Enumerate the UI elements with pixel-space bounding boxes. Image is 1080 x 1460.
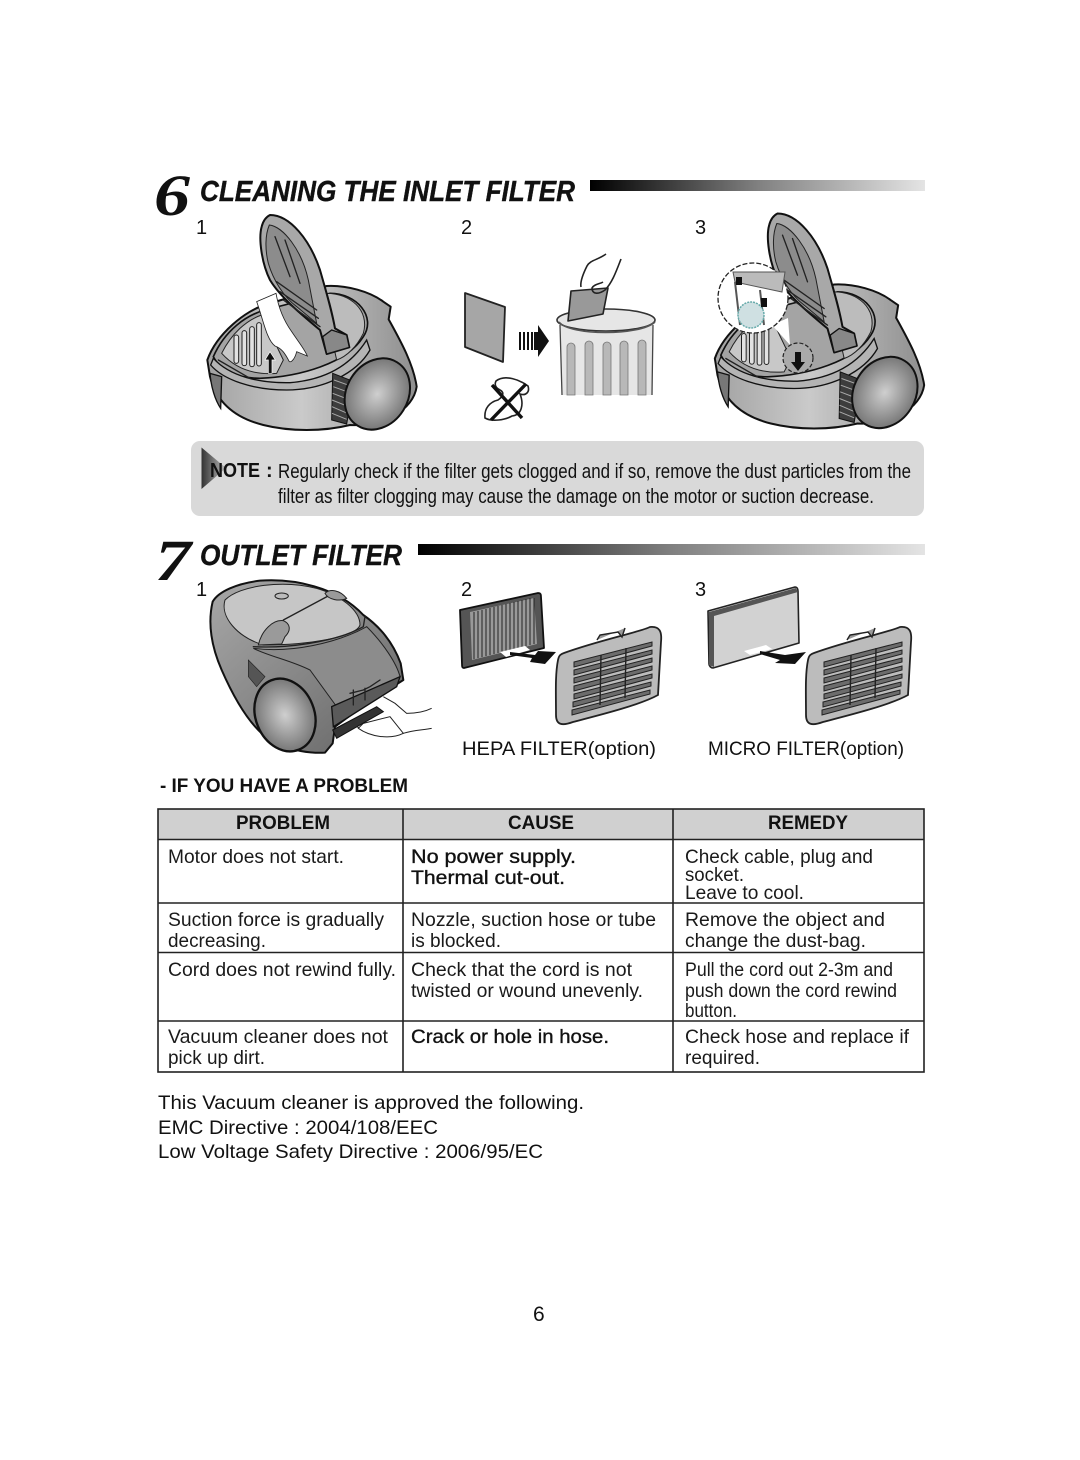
row: motor does not start — [168, 846, 873, 904]
icon: filter pad going into bin — [568, 288, 608, 321]
row: motor does not start: Check cable, plug and — [685, 846, 873, 868]
row: cord does not rewind: push down the cord rewind — [685, 980, 897, 1002]
hand — [257, 293, 307, 362]
icon: filter pad — [465, 293, 505, 362]
row: suction force: Nozzle, suction hose or tube — [411, 909, 656, 931]
row: does not pick up dirt: pick up dirt. — [168, 1047, 265, 1069]
HEPA filter — [460, 593, 544, 668]
note triangle — [202, 448, 226, 489]
illustration: vacuum front with hand pulling grille — [210, 580, 432, 761]
illustration: HEPA filter removed from grille — [460, 593, 661, 724]
section number 6: 6 — [154, 163, 190, 228]
row: motor does not start: No power supply. — [411, 846, 576, 868]
white stripes and arrow — [744, 645, 772, 655]
icon: trash bin — [557, 309, 655, 395]
heading: cleaning the inlet filter: CLEANING THE INLET FILTER — [200, 176, 575, 208]
table header: REMEDY — [768, 812, 848, 834]
down arrow — [791, 352, 805, 371]
heading gradient bar — [418, 544, 925, 555]
row: suction force: Suction force is gradually — [168, 909, 384, 931]
step number 1: 1 — [196, 217, 207, 239]
hand — [357, 697, 432, 735]
troubleshooting table — [158, 809, 924, 1072]
icon: arrow right — [519, 325, 549, 357]
caption: micro filter: MICRO FILTER(option) — [708, 738, 904, 760]
row: suction force — [168, 909, 885, 952]
icon: no washing crossed hands — [485, 378, 529, 420]
row: does not pick up dirt: Crack or hole in hose. — [411, 1026, 609, 1048]
illustration: reinstalling inlet filter with magnified view — [715, 213, 931, 440]
up arrow — [265, 352, 275, 373]
row: cord does not rewind: Cord does not rewind fully. — [168, 959, 396, 981]
table header: CAUSE — [508, 812, 574, 834]
micro filter — [708, 587, 799, 668]
step number 2: 2 — [461, 579, 472, 601]
step number 2: 2 — [461, 217, 472, 239]
row: motor does not start: Motor does not start. — [168, 846, 344, 868]
note text: Regularly check if the filter gets clogged and if so, remove the dust particles from the — [278, 460, 911, 483]
row: suction force: is blocked. — [411, 930, 501, 952]
heading gradient bar — [590, 180, 925, 191]
approval statement: Low Voltage Safety Directive : 2006/95/EC — [158, 1141, 543, 1163]
step number 1: 1 — [196, 579, 207, 601]
row: cord does not rewind: Check that the cord is not — [411, 959, 633, 981]
row: cord does not rewind — [168, 959, 897, 1022]
row: suction force: Remove the object and — [685, 909, 885, 931]
step number 3: 3 — [695, 217, 706, 239]
row: does not pick up dirt: Check hose and replace if — [685, 1026, 910, 1048]
white stripes and arrow — [500, 646, 530, 657]
row: motor does not start: Thermal cut-out. — [411, 867, 565, 889]
magnifier detail — [718, 263, 788, 333]
note panel — [191, 441, 924, 516]
row: does not pick up dirt — [168, 1026, 910, 1069]
caption: HEPA filter: HEPA FILTER(option) — [462, 738, 656, 760]
subheading: if you have a problem: - IF YOU HAVE A PROBLEM — [160, 775, 408, 797]
note panel: : — [266, 460, 273, 482]
row: cord does not rewind: button. — [685, 1000, 737, 1022]
illustration: micro filter removed from grille — [708, 587, 911, 724]
row: suction force: decreasing. — [168, 930, 266, 952]
page number: 6 — [533, 1303, 545, 1326]
row: motor does not start: socket. — [685, 864, 744, 886]
heading: outlet filter: OUTLET FILTER — [200, 540, 402, 572]
approval statement: This Vacuum cleaner is approved the following. — [158, 1092, 584, 1114]
illustration: filter to bin — [465, 254, 655, 420]
table header — [158, 809, 924, 839]
table header: PROBLEM — [236, 812, 330, 834]
vent grille — [806, 627, 911, 724]
section number 7: 7 — [155, 528, 193, 593]
small dashed detail circle — [783, 343, 813, 373]
row: cord does not rewind: twisted or wound unevenly. — [411, 980, 643, 1002]
illustration: hand removing inlet filter from vacuum — [207, 215, 423, 442]
note label: NOTE — [210, 460, 260, 482]
icon: hand holding filter — [581, 254, 621, 293]
step number 3: 3 — [695, 579, 706, 601]
vent grille — [556, 627, 661, 724]
note panel: filter as filter clogging may cause the damage on the motor or suction decrease. — [278, 485, 874, 508]
row: motor does not start: Leave to cool. — [685, 882, 804, 904]
approval statement — [158, 1092, 584, 1163]
row: suction force: change the dust-bag. — [685, 930, 866, 952]
row: does not pick up dirt: Vacuum cleaner does not — [168, 1026, 389, 1048]
row: does not pick up dirt: required. — [685, 1047, 760, 1069]
row: cord does not rewind: Pull the cord out 2-3m and — [685, 959, 893, 981]
approval statement: EMC Directive : 2004/108/EEC — [158, 1117, 438, 1139]
white pointer wedge — [772, 318, 790, 345]
